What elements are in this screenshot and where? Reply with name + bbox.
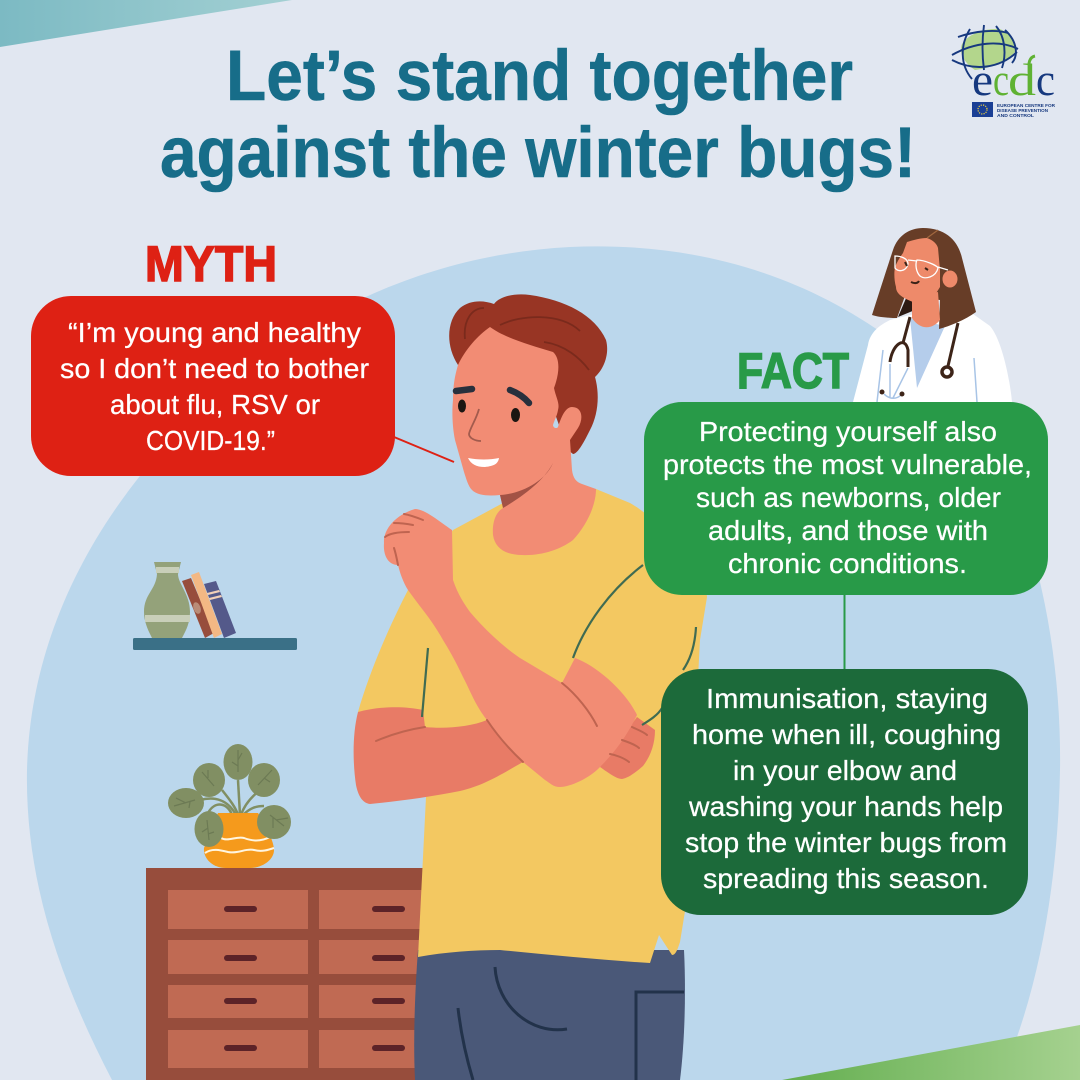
blue shirt xyxy=(910,318,945,388)
ECDC logo: e xyxy=(972,54,993,105)
fact text: such as newborns, older xyxy=(696,482,1001,513)
eyebrows xyxy=(456,389,529,403)
corner accent: top left xyxy=(0,0,292,47)
ECDC logo: EUROPEAN CENTRE FOR xyxy=(997,103,1056,109)
nose xyxy=(469,409,481,441)
raised arm and fist xyxy=(384,509,637,787)
trousers xyxy=(414,950,685,1080)
lab coat xyxy=(853,314,1012,402)
prevention text: in your elbow and xyxy=(733,755,957,786)
hand tucked under arm xyxy=(600,717,655,779)
stethoscope xyxy=(890,317,958,367)
chest of drawers xyxy=(146,868,436,1080)
ECDC logo xyxy=(952,25,1056,119)
ECDC logo: d xyxy=(1008,54,1036,105)
neck shadow xyxy=(500,463,553,508)
shelf with vase and books xyxy=(133,562,297,650)
prevention text: stop the winter bugs from xyxy=(685,827,1007,858)
MYTH heading: MYTH xyxy=(145,236,277,292)
connector: fact bubbles xyxy=(844,594,846,670)
left forearm xyxy=(354,707,523,804)
panel: myth bubble xyxy=(31,296,395,476)
prevention text xyxy=(685,683,1007,894)
smile xyxy=(468,458,499,467)
ECDC logo: c xyxy=(1036,54,1055,105)
ear xyxy=(942,270,958,288)
hair parting xyxy=(927,230,938,238)
fact text: chronic conditions. xyxy=(728,548,967,579)
ECDC logo: AND CONTROL xyxy=(997,113,1034,119)
neck xyxy=(912,292,940,327)
panel: prevention bubble xyxy=(661,669,1028,915)
doctor eyes and mouth xyxy=(905,262,928,283)
ECDC logo: DISEASE PREVENTION xyxy=(997,108,1049,114)
fact text xyxy=(663,416,1032,579)
panel: fact bubble xyxy=(644,402,1048,595)
myth quote xyxy=(60,317,369,456)
prevention text: home when ill, coughing xyxy=(692,719,1001,750)
yellow t-shirt xyxy=(358,489,707,963)
man illustration xyxy=(354,294,707,1080)
trouser lines xyxy=(458,967,684,1080)
myth quote: “I’m young and healthy xyxy=(68,317,361,348)
doctor illustration xyxy=(853,228,1012,402)
ECDC logo: c xyxy=(993,54,1009,105)
glasses xyxy=(895,256,948,278)
shirt seam lines xyxy=(422,565,696,725)
connector: myth bubble to man xyxy=(394,437,454,462)
hair xyxy=(872,228,976,329)
head and neck xyxy=(452,327,596,555)
fact text: protects the most vulnerable, xyxy=(663,449,1032,480)
prevention text: washing your hands help xyxy=(688,791,1003,822)
title: against the winter bugs! xyxy=(160,114,916,193)
coat lines xyxy=(877,350,977,402)
FACT heading: FACT xyxy=(737,343,849,399)
title: Let’s stand together xyxy=(226,37,853,116)
fact text: Protecting yourself also xyxy=(699,416,997,447)
title xyxy=(160,37,916,193)
myth quote: COVID-19.” xyxy=(146,425,275,456)
hair strands xyxy=(465,308,589,370)
background blob xyxy=(27,246,1060,1080)
prevention text: Immunisation, staying xyxy=(706,683,988,714)
face xyxy=(894,238,940,302)
dark hair behind neck xyxy=(898,296,916,317)
hair xyxy=(449,294,607,454)
myth quote: so I don’t need to bother xyxy=(60,353,369,384)
fact text: adults, and those with xyxy=(708,515,988,546)
prevention text: spreading this season. xyxy=(703,863,989,894)
eyes xyxy=(458,400,520,422)
myth quote: about flu, RSV or xyxy=(110,389,320,420)
arm crease lines xyxy=(376,514,647,762)
potted plant xyxy=(168,744,291,868)
corner accent: bottom right xyxy=(782,1025,1080,1080)
